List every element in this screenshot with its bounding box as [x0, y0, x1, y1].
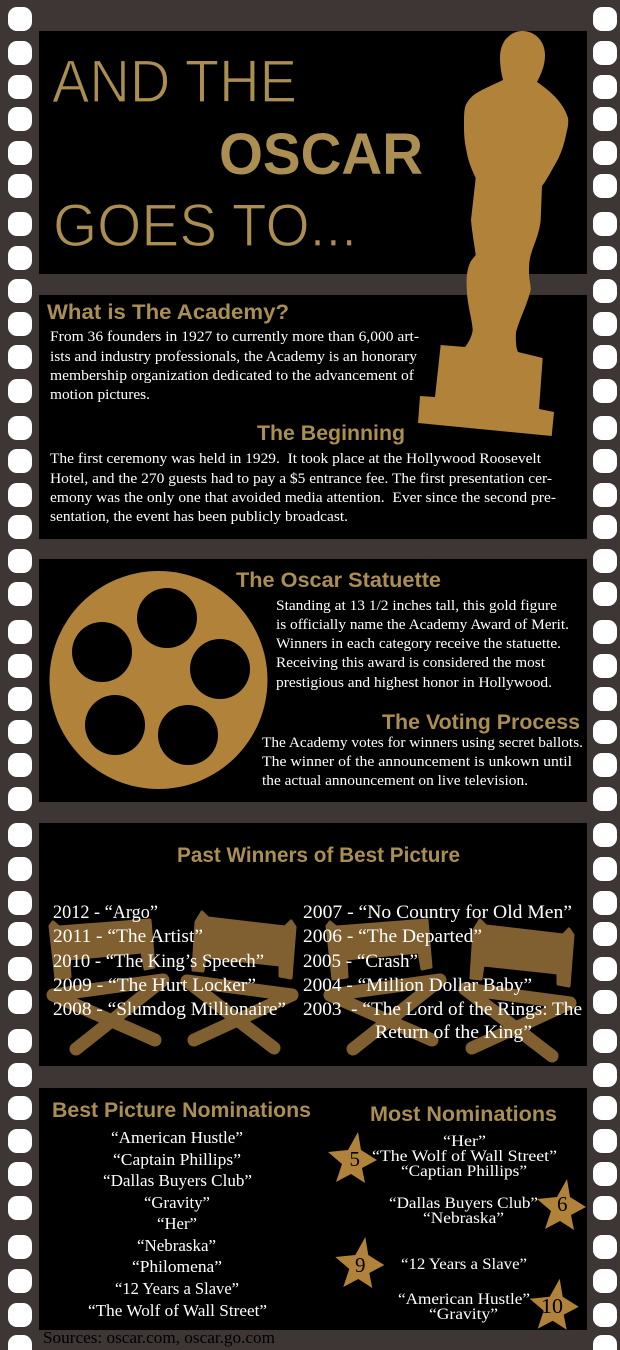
star badge: 10 nominations: 10 [541, 1294, 563, 1318]
list: films with 9 nominations: “12 Years a Slave” [401, 1256, 527, 1273]
list: films with 10 nominations [398, 1291, 530, 1323]
film strip sprocket holes, left [8, 7, 32, 1350]
list: films with 6 nominations: “Nebraska” [423, 1210, 504, 1227]
icon: oscar statuette silhouette [418, 31, 568, 436]
title line: GOES TO...: GOES TO... [53, 192, 357, 259]
list: winners 2007 to 2003: 2007 - “No Country for Old Men” [303, 902, 572, 923]
list: winners 2012 to 2008: 2008 - “Slumdog Millionaire” [53, 999, 286, 1020]
heading: The Voting Process: The Voting Process [382, 711, 580, 734]
list: winners 2012 to 2008 [53, 902, 286, 1020]
star badge: 6 nominations [537, 1179, 586, 1230]
star badge: 9 nominations [335, 1237, 384, 1288]
list: films with 10 nominations: “American Hustle” [398, 1291, 530, 1308]
panel: past winners of best picture [39, 823, 587, 1066]
list: films with 5 nominations: “Captian Phillips” [401, 1163, 527, 1180]
list: winners 2007 to 2003: 2004 - “Million Dollar Baby” [303, 975, 532, 996]
text block: voting process: The Academy votes for winners using secret ballots. [262, 735, 583, 751]
sources line: Sources: oscar.com, oscar.go.com [43, 1328, 275, 1347]
list: winners 2007 to 2003: 2006 - “The Departed” [303, 926, 482, 947]
text block: the beginning: Hotel, and the 270 guests had to pay a $5 entrance fee. The first presentation cer- [50, 471, 552, 487]
star badge: 5 nominations: 5 [350, 1147, 360, 1171]
icon: director's chair 1 [50, 920, 163, 1049]
title line: OSCAR: OSCAR [219, 122, 423, 187]
icon: director's chair 3 [327, 920, 440, 1049]
list: films with 5 nominations [372, 1133, 557, 1180]
title line: AND THE: AND THE [52, 48, 297, 115]
panel: the oscar statuette and voting process [39, 559, 587, 802]
star badge: 10 nominations [530, 1279, 579, 1330]
list: winners 2007 to 2003: Return of the King” [375, 1022, 532, 1043]
list: best picture nominees: “12 Years a Slave” [115, 1279, 239, 1298]
heading: The Oscar Statuette: The Oscar Statuette [236, 569, 441, 592]
text block: the beginning [50, 451, 556, 525]
star badge: 5 nominations [328, 1132, 377, 1183]
list: winners 2007 to 2003 [303, 902, 582, 1043]
list: best picture nominees: “Dallas Buyers Club” [103, 1171, 252, 1190]
list: films with 6 nominations [389, 1195, 538, 1227]
text block: academy description: ists and industry professionals, the Academy is an honorary [50, 349, 418, 365]
list: winners 2007 to 2003: 2003 - “The Lord of the Rings: The [303, 999, 582, 1020]
icon: director's chair 4 [465, 920, 573, 1056]
list: films with 10 nominations: “Gravity” [429, 1306, 498, 1323]
list: best picture nominees: “American Hustle” [111, 1128, 243, 1147]
list: winners 2012 to 2008: 2009 - “The Hurt Locker” [53, 975, 256, 996]
list: films with 5 nominations: “Her” [443, 1133, 486, 1150]
list: best picture nominees [88, 1128, 267, 1320]
heading: The Beginning: The Beginning [257, 422, 405, 445]
heading: Most Nominations: Most Nominations [370, 1103, 557, 1126]
icon: film reel [50, 571, 268, 789]
text block: statuette description: is officially name the Academy Award of Merit. [276, 617, 569, 633]
text block: statuette description: Winners in each category receive the statuette. [276, 636, 561, 652]
film strip sprocket holes, right [593, 7, 617, 1350]
list: winners 2012 to 2008: 2012 - “Argo” [53, 902, 158, 923]
heading: Past Winners of Best Picture: Past Winners of Best Picture [177, 844, 460, 867]
list: winners 2012 to 2008: 2011 - “The Artist” [53, 926, 203, 947]
text block: academy description: motion pictures. [50, 387, 150, 403]
heading: Best Picture Nominations: Best Picture Nominations [52, 1099, 311, 1122]
text block: voting process: the actual announcement on live television. [262, 773, 528, 789]
list: winners 2007 to 2003: 2005 - “Crash” [303, 951, 418, 972]
list: best picture nominees: “Philomena” [132, 1257, 222, 1276]
text block: academy description [50, 329, 419, 403]
list: best picture nominees: “The Wolf of Wall Street” [88, 1301, 267, 1320]
panel: what is the academy and the beginning [39, 295, 587, 539]
panel: title [39, 31, 587, 274]
list: best picture nominees: “Nebraska” [137, 1236, 216, 1255]
list: films with 6 nominations: “Dallas Buyers Club” [389, 1195, 538, 1212]
text block: statuette description: Receiving this award is considered the most [276, 655, 545, 671]
text block: statuette description [276, 598, 569, 691]
text block: voting process [262, 735, 583, 789]
list: films with 5 nominations: “The Wolf of Wall Street” [372, 1148, 557, 1165]
icon: director's chair 2 [187, 912, 295, 1048]
text block: voting process: The winner of the announcement is unkown until [262, 754, 572, 770]
list: winners 2012 to 2008: 2010 - “The King’s Speech” [53, 951, 264, 972]
text block: academy description: membership organization dedicated to the advancement of [50, 368, 414, 384]
text block: the beginning: emony was the only one that avoided media attention. Ever since the second pre- [50, 490, 556, 506]
text block: statuette description: Standing at 13 1/2 inches tall, this gold figure [276, 598, 557, 614]
heading: What is The Academy?: What is The Academy? [47, 301, 289, 324]
list: best picture nominees: “Her” [157, 1214, 197, 1233]
text block: academy description: From 36 founders in 1927 to currently more than 6,000 art- [50, 329, 419, 345]
panel: nominations [39, 1088, 587, 1330]
star badge: 9 nominations: 9 [355, 1253, 366, 1277]
text block: statuette description: prestigious and highest honor in Hollywood. [276, 675, 552, 691]
list: best picture nominees: “Captain Phillips” [113, 1150, 241, 1169]
text block: the beginning: The first ceremony was held in 1929. It took place at the Hollywood Roosevelt [50, 451, 541, 467]
text block: the beginning: sentation, the event has been publicly broadcast. [50, 509, 348, 525]
list: best picture nominees: “Gravity” [144, 1193, 210, 1212]
star badge: 6 nominations: 6 [557, 1192, 568, 1216]
